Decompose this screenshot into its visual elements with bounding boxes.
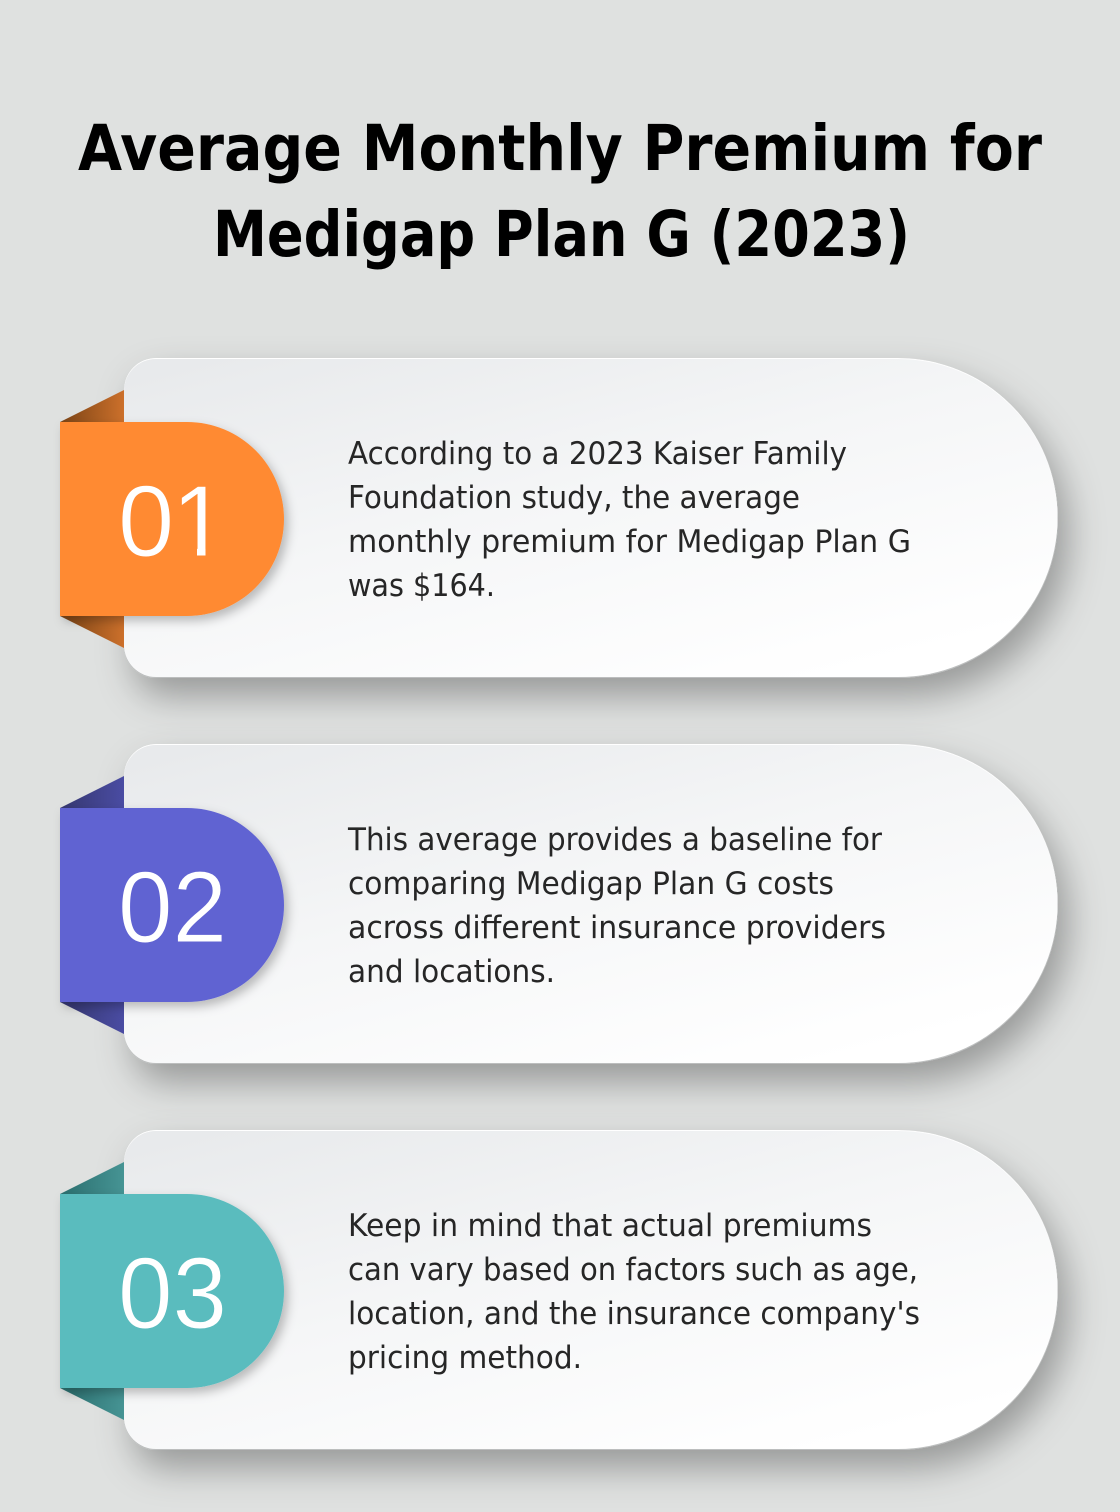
- number 01: 1: [172, 466, 228, 578]
- text 01: was $164.: [348, 568, 495, 604]
- title: Medigap Plan G (2023): [213, 197, 910, 271]
- badge 02: [60, 808, 284, 1002]
- number 03: 03: [118, 1238, 227, 1350]
- text 02: and locations.: [348, 954, 555, 990]
- text 03: location, and the insurance company's: [348, 1296, 920, 1332]
- card 03: [124, 1130, 1058, 1450]
- ribbon folds 02: [60, 776, 124, 1034]
- text 01: monthly premium for Medigap Plan G: [348, 524, 911, 560]
- text 03: Keep in mind that actual premiums: [348, 1208, 872, 1244]
- text 01: Foundation study, the average: [348, 480, 800, 516]
- number 02: 02: [118, 852, 227, 964]
- panel: step 01: [60, 358, 1058, 678]
- title: [78, 111, 1043, 271]
- title: Average Monthly Premium for: [78, 111, 1043, 185]
- ribbon folds 03: [60, 1162, 124, 1420]
- panel: step 02: [60, 744, 1058, 1064]
- text 01: [348, 436, 911, 604]
- ribbon folds 01: [60, 390, 124, 648]
- badge 01: [60, 422, 284, 616]
- text 02: across different insurance providers: [348, 910, 886, 946]
- badge 03: [60, 1194, 284, 1388]
- text 03: [348, 1208, 920, 1376]
- text 03: can vary based on factors such as age,: [348, 1252, 918, 1288]
- panel: step 03: [60, 1130, 1058, 1450]
- card 01: [124, 358, 1058, 678]
- text 02: [347, 822, 886, 990]
- text 01: According to a 2023 Kaiser Family: [348, 436, 847, 472]
- text 02: This average provides a baseline for: [347, 822, 882, 858]
- text 02: comparing Medigap Plan G costs: [348, 866, 834, 902]
- card 02: [124, 744, 1058, 1064]
- number 01: 0: [118, 466, 174, 578]
- text 03: pricing method.: [348, 1340, 582, 1376]
